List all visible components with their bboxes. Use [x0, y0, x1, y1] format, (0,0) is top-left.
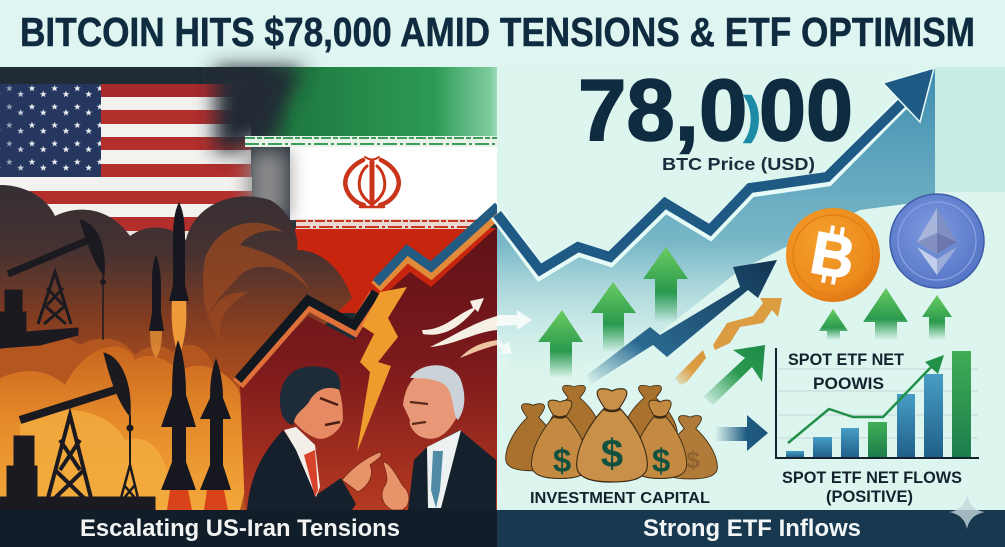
- icon: Bitcoin coin: B: [806, 219, 860, 292]
- orange zigzag arrow: [675, 350, 706, 385]
- inner smoke swirls: [203, 223, 310, 340]
- price figure: ): [744, 87, 761, 143]
- chart overlaid heading: [788, 351, 904, 393]
- panel: ETF inflows: [497, 62, 1005, 510]
- icon: top oil pump: [0, 220, 106, 348]
- icon: money bags: $: [652, 442, 670, 479]
- icon: Ethereum coin: [890, 194, 984, 288]
- script band top: [245, 136, 497, 147]
- left leader figure: [247, 366, 381, 510]
- Iran flag: [215, 67, 515, 313]
- bar chart: spot ETF flows: [776, 348, 979, 458]
- footer: left: Escalating US-Iran Tensions: [80, 515, 400, 542]
- chart caption: [782, 469, 962, 506]
- footer: right: [497, 510, 1005, 547]
- smoke clouds: [0, 185, 352, 400]
- icon: wind swooshes: [422, 298, 497, 358]
- US flag: [0, 84, 252, 243]
- script band bottom: [296, 219, 486, 229]
- price figure: 78,0: [578, 62, 747, 159]
- hair: [410, 365, 464, 420]
- investment capital caption: INVESTMENT CAPITAL: [530, 490, 710, 507]
- blue arrow into chart: [715, 415, 768, 451]
- chart caption: SPOT ETF NET FLOWS: [782, 469, 962, 487]
- arrow: inflow from left panel: [497, 310, 532, 354]
- hair: [280, 366, 340, 425]
- dark red background behind leaders: [240, 227, 497, 510]
- footer: left: [0, 510, 497, 547]
- flag transition haze: [215, 67, 305, 220]
- icon: money bags: $: [686, 447, 700, 474]
- head: [285, 370, 343, 439]
- brow and mouth: [410, 402, 428, 424]
- icon: Bitcoin coin: [786, 208, 880, 302]
- suit: [247, 430, 356, 510]
- right leader figure: [382, 365, 496, 510]
- raised hand: [382, 462, 409, 510]
- icon: sparkle watermark: [949, 495, 985, 529]
- price figure: 00: [759, 62, 853, 159]
- icon: Iran emblem: [345, 157, 399, 207]
- pointing hand: [342, 452, 381, 492]
- head: [403, 370, 459, 439]
- price caption: BTC Price (USD): [662, 154, 815, 174]
- footer: right: Strong ETF Inflows: [643, 515, 861, 542]
- chart overlaid heading: SPOT ETF NET: [788, 351, 904, 369]
- green up arrows: left group: [538, 247, 688, 378]
- panel: US-Iran tensions: [0, 67, 515, 510]
- chart overlaid heading: POOWIS: [813, 375, 884, 393]
- icon: money bags: $: [553, 442, 571, 479]
- flame: [172, 301, 186, 356]
- green diagonal arrow: [703, 345, 765, 405]
- chart area fill: [497, 68, 935, 390]
- shirt and tie: [284, 427, 320, 497]
- icon: rockets: [149, 202, 231, 510]
- shirt and tie: [427, 430, 461, 508]
- fire layer: [0, 334, 247, 510]
- icon: money bags: $: [601, 432, 623, 476]
- zigzag chart line on tensions panel: [238, 206, 498, 384]
- icon: money bags: [506, 385, 717, 482]
- green up arrows: right group: [819, 288, 952, 340]
- chart caption: (POSITIVE): [826, 488, 913, 506]
- icon: bottom oil pump: [0, 353, 155, 510]
- large dark diagonal arrow: [587, 260, 777, 385]
- BTC price line arrow: [497, 68, 934, 272]
- suit: [408, 430, 496, 510]
- brow and mouth: [320, 398, 340, 425]
- price figure: [578, 62, 853, 159]
- icon: lightning bolt: [357, 287, 407, 452]
